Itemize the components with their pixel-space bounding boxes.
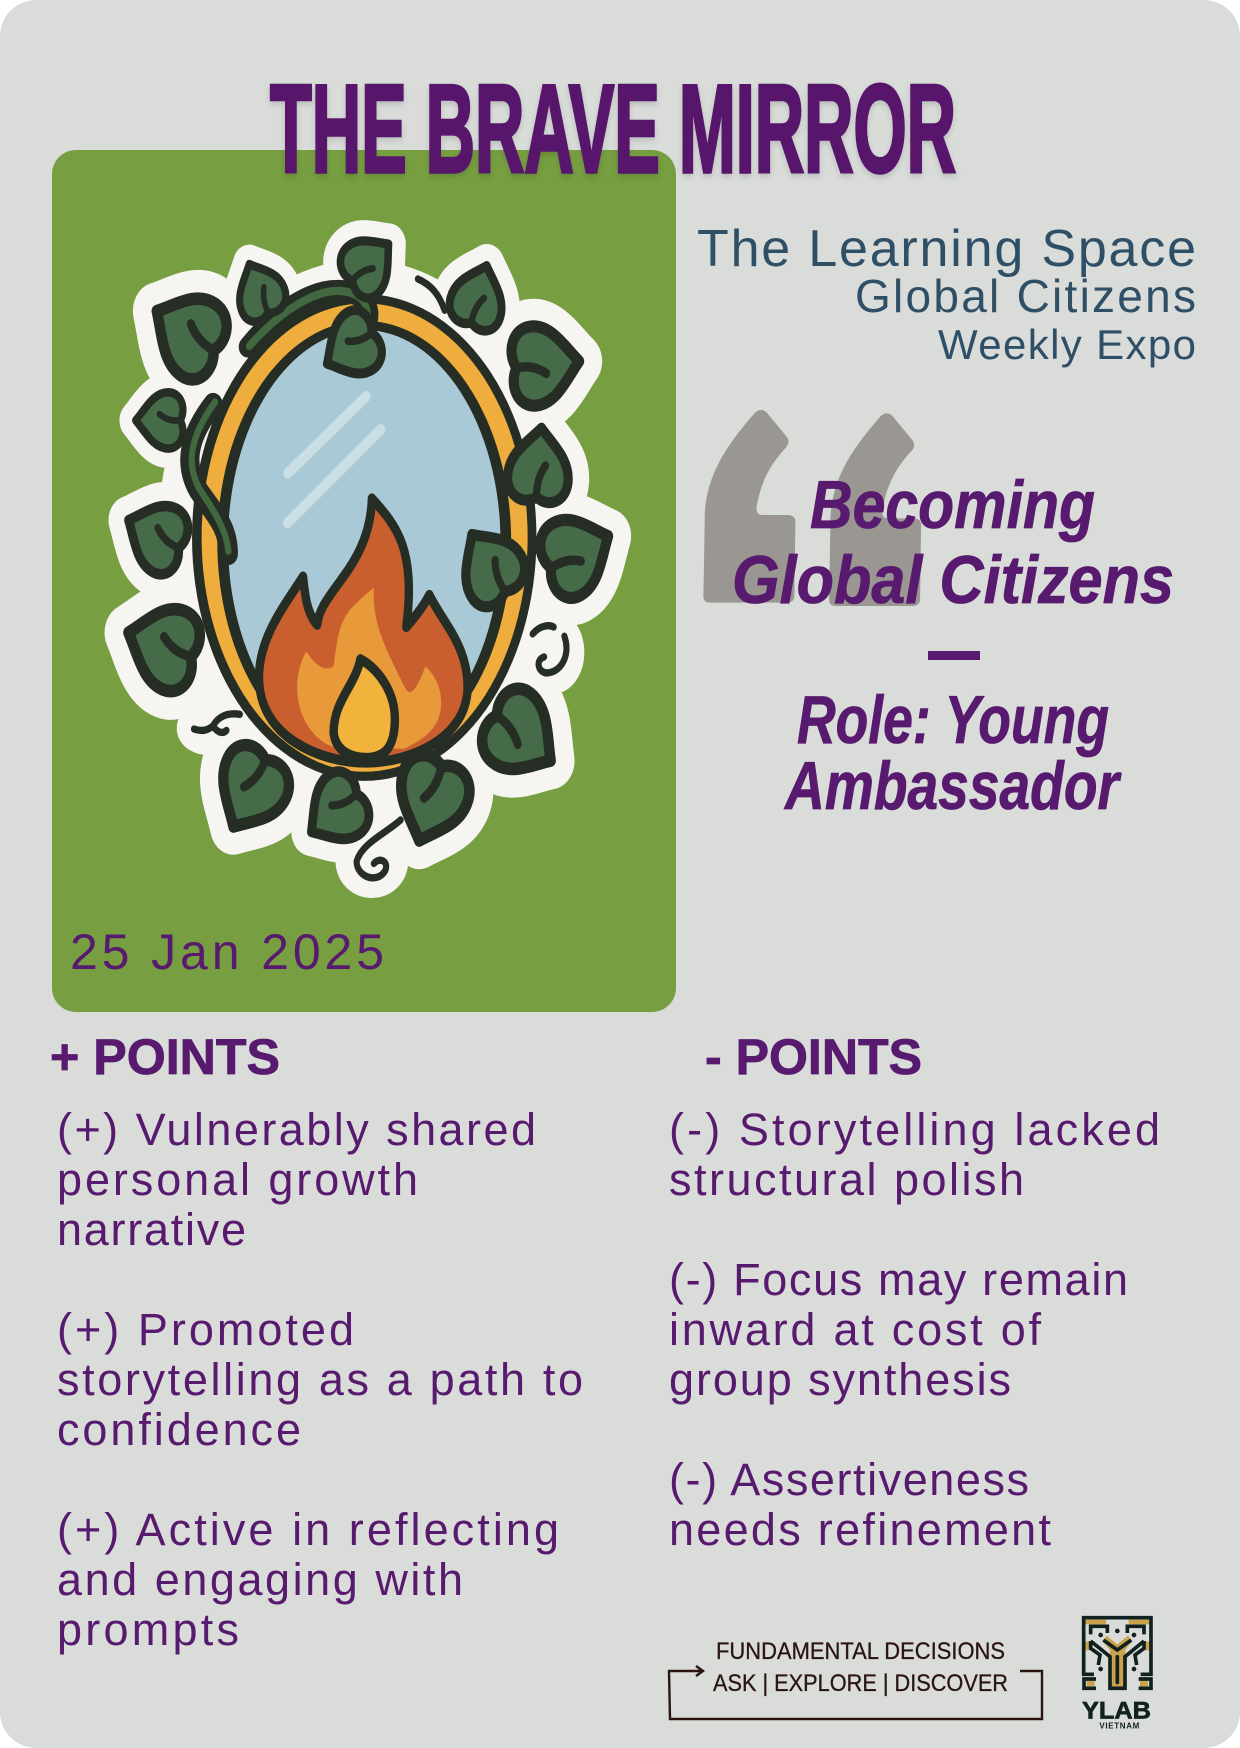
text block: plus points list: narrative (57, 1204, 246, 1255)
subtitle block: Weekly Expo (938, 321, 1196, 368)
mirror glare (288, 397, 381, 523)
quote: topic and role: Global Citizens (732, 542, 1174, 618)
text block: minus points list: (-) Focus may remain (669, 1254, 1128, 1305)
heading: plus points: + POINTS (50, 1029, 280, 1085)
panel: green illustration card (52, 150, 676, 1012)
vines (190, 279, 566, 878)
text block: minus points list (669, 1104, 1160, 1555)
subtitle block (697, 220, 1196, 368)
text block: minus points list: group synthesis (669, 1354, 1011, 1405)
leaves (116, 221, 622, 860)
mirror frame (192, 294, 536, 781)
heading: minus points: - POINTS (705, 1029, 922, 1085)
text block: plus points list: confidence (57, 1404, 301, 1455)
quote: topic and role: Becoming (810, 467, 1095, 543)
text block: minus points list: (-) Assertiveness (669, 1454, 1029, 1505)
mirror glass (228, 330, 500, 754)
date: 25 Jan 2025 (70, 924, 384, 980)
icon: quotation marks (703, 410, 921, 606)
text block: minus points list: inward at cost of (669, 1304, 1041, 1355)
text block: plus points list: personal growth (57, 1154, 418, 1205)
quote: topic and role (732, 467, 1174, 824)
text block: plus points list: (+) Promoted (57, 1304, 354, 1355)
text block: plus points list: prompts (57, 1604, 239, 1655)
text block: minus points list: needs refinement (669, 1504, 1051, 1555)
text block: plus points list: storytelling as a path to (57, 1354, 583, 1405)
logo tagline: VIETNAM (1099, 1721, 1140, 1730)
flame (259, 498, 468, 763)
subtitle block: Global Citizens (855, 270, 1196, 322)
text block: minus points list: (-) Storytelling lacked (669, 1104, 1160, 1155)
footer: fundamental decisions cycle (669, 1638, 1042, 1719)
quote: topic and role: Ambassador (783, 748, 1122, 824)
text block: plus points list: (+) Active in reflecting (57, 1504, 559, 1555)
text block: minus points list: structural polish (669, 1154, 1024, 1205)
quote: topic and role: Role: Young (797, 682, 1109, 758)
logo mark (1084, 1618, 1151, 1688)
logo wordmark: YLAB (1082, 1697, 1151, 1724)
illustration: mirror with fire and vines (116, 221, 622, 882)
text block: plus points list: and engaging with (57, 1554, 463, 1605)
text block: plus points list (57, 1104, 583, 1655)
text block: plus points list: (+) Vulnerably shared (57, 1104, 536, 1155)
footer: fundamental decisions cycle: FUNDAMENTAL DECISIONS (716, 1638, 1005, 1665)
logo: YLAB Vietnam (1082, 1618, 1151, 1730)
sticker white backing (116, 221, 622, 882)
footer: fundamental decisions cycle: ASK | EXPLORE | DISCOVER (713, 1670, 1008, 1697)
subtitle block: The Learning Space (697, 220, 1196, 278)
